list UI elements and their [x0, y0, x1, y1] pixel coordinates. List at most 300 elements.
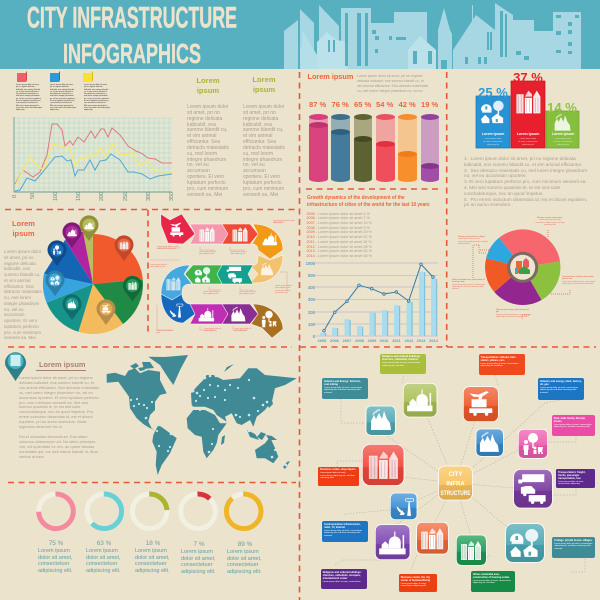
pie chart with map pins [43, 215, 143, 334]
heading: growth dynamics [306, 195, 430, 208]
mind map box: transportation purple [556, 469, 595, 488]
legend text 3: no, vel eu accumsan oportere. [84, 98, 109, 100]
map panel text: Lorem ipsum dolor sit amet, pri no regione [19, 375, 93, 380]
chart axis labels: 250 [123, 192, 129, 201]
ring text 3: Lorem ipsum [135, 548, 167, 554]
map panel text: summo quaestio le, te est sint solet [19, 404, 80, 409]
mind map box: communication [322, 521, 368, 542]
chart axis labels: 150 [76, 192, 82, 201]
pie panel text: accumsan [4, 312, 25, 317]
pie panel text: sit amet, pri no [4, 255, 34, 260]
line and bar chart: 2006 [330, 338, 340, 343]
title: INFOGRAPHICS [63, 38, 201, 69]
cylinder panel text: cu, mel lorem integre phaedrum no, vel eu [357, 89, 423, 93]
icon: houses [506, 524, 544, 562]
map pins [46, 215, 142, 325]
pie panel text: ludicabit, eos [4, 266, 30, 271]
donut callout: top: Lorem ipsum dolor sit amet, consectetuer adipiscing elit, sed diam nonummy nibh [535, 219, 565, 226]
legend text 1: cu, et vim animal efficiantur. [16, 91, 39, 93]
legend text 3: ludicabit, eos summo blandit [84, 89, 108, 91]
line and bar chart: 1000 [306, 261, 316, 266]
donut callout: right [562, 276, 595, 285]
snake callout: upper red: Lorem ipsum dolor sit amet adipiscing elit [230, 251, 247, 255]
mind map box: business: Business center, skyscrapers [320, 468, 355, 471]
pie panel text: regione delicata [4, 260, 36, 266]
line and bar chart: 2013 [417, 338, 426, 343]
mind map box: industry blue: Lorem ipsum dolor sit amet, consectetuer adipiscing elit, sed diam nonummy nibh euismod [540, 387, 578, 394]
percent bars with icons: Lorem ipsum [482, 132, 504, 136]
pie panel text: et vim animal [4, 278, 31, 283]
icon: power tower [476, 429, 503, 456]
ring text 4 [181, 549, 216, 575]
map location pin [5, 352, 26, 381]
donut callout: left: Cottage, private house, villages [458, 236, 485, 238]
cylinder chart [309, 114, 439, 182]
text column 1: regione delicata [187, 116, 222, 122]
icon: residential green [456, 535, 486, 565]
percent bars with icons: sit amet, consectetuer [553, 140, 573, 143]
percent bars with icons: sit amet, consectetuer [518, 140, 538, 143]
legend text 1: cum minimum senserit ea. [16, 102, 38, 104]
pie panel text: oportere. Ei vero [4, 318, 37, 323]
legend text 1: mel lorem integre phaedrum [16, 95, 40, 97]
mind map box: leisure: Park, walk, family, lifestyle leisure [554, 416, 585, 422]
title [27, 2, 237, 69]
growth data list: 2006 - Lorem ipsum dolor sit amet 7 % [306, 216, 370, 220]
numbered list: 3. Ei vero luptatum perfecto pro, cum minimum senserit ea. [464, 179, 587, 184]
percent bars with icons [476, 70, 579, 148]
legend text 3: Mei wisi summo quaestio le, [84, 105, 108, 107]
text: 42 % [398, 100, 416, 109]
ring text 1 [38, 548, 73, 574]
ring text 2 [86, 548, 121, 574]
heading: cylinder panel: Lorem ipsum [308, 72, 353, 81]
donut callout: left: Lorem ipsum dolor sit amet, consectetuer adipiscing elit, sed diam nonummy nibh [458, 238, 488, 245]
text: 54 % [376, 100, 393, 109]
line and bar chart: 100 [308, 322, 316, 327]
line and bar chart: 300 [308, 297, 316, 302]
map panel text: honestatis qui. Ius dicit ridens blandit ut, illum [19, 449, 98, 454]
text: 76 % [332, 100, 349, 109]
cylinder panel text: vim animal efficiantur. Sea detracto maiestatis [357, 84, 428, 88]
donut callout: bottom: Industry and energy: plant, factory, oil, gas [496, 309, 529, 313]
growth data list: 2007 - Lorem ipsum dolor sit amet 14 % [306, 221, 372, 225]
line and bar chart: 200 [308, 310, 316, 315]
growth data list: 2005 - Lorem ipsum dolor sit amet 4 % [306, 212, 370, 216]
text column 2: detracto maiestatis [243, 145, 285, 151]
legend text 3: cum minimum senserit ea. [84, 102, 106, 104]
mind map box: transport [478, 354, 524, 375]
ring text 2: adipiscing elit. [86, 568, 121, 574]
legend text 2: Lorem ipsum dolor sit amet, [50, 84, 73, 86]
heading: pie panel: ipsum [12, 229, 35, 238]
donut callout: bottom [496, 308, 529, 318]
line and bar chart: 500 [308, 273, 316, 278]
centre node [438, 466, 472, 500]
text column 2 [243, 104, 285, 198]
text column 1: cu, mel lorem [187, 151, 217, 157]
mind map box: communication: Lorem ipsum dolor sit amet, consectetuer adipiscing elit, sed diam nonummy nibh euismod [324, 530, 362, 537]
ring text 4: adipiscing elit. [181, 569, 216, 575]
legend text 3: cu, et vim animal efficiantur. [84, 91, 107, 93]
legend text 2: cum minimum senserit ea. [50, 102, 72, 104]
mind map box: leisure: Lorem ipsum dolor sit amet, consectetuer adipiscing elit, sed diam nonummy nibh [554, 424, 592, 428]
snake callout: lower purple: Lorem ipsum dolor sit amet adipiscing [234, 328, 251, 332]
mind map box: business [318, 467, 359, 486]
legend text 1: Mei wisi summo quaestio le, [16, 105, 40, 107]
ring text 3: consectetuer [135, 561, 166, 567]
legend text 1: Sea detracto maiestatis cu, [16, 93, 39, 95]
mind map box: religious violet: Lorem ipsum dolor sit amet, consectetuer [323, 581, 361, 583]
mind map box: urban residential: Lorem ipsum dolor sit amet, consectetuer adipiscing elit, sed diam [473, 580, 511, 584]
growth data list: 2014 - Lorem ipsum dolor sit amet 48 % [306, 254, 372, 258]
donut callout: right: Lorem ipsum dolor sit amet, consectetuer adipiscing elit, sed diam nonummy nibh [562, 281, 595, 285]
percent bars with icons: sit amet, consectetuer [483, 140, 503, 143]
text column 1: pro, cum minimum [187, 186, 228, 192]
pie panel text: no, vel eu [4, 306, 24, 312]
heading: growth dynamics: infrastructure of cities of the world for the last 10 years [306, 202, 429, 208]
ring label 63%: 63 % [97, 540, 111, 547]
text column 2: summo blandit cu, [243, 127, 284, 133]
text column 2: accumsan [243, 168, 266, 174]
snake callout: middle green: Lorem ipsum dolor sit amet adipiscing elit [203, 291, 220, 295]
numbered list: 4. Mei wisi summo quaestio le, te est sint solet [464, 185, 560, 190]
map panel text: equidem, pri an aumo vivendum. Malis [19, 419, 86, 424]
numbered list [464, 156, 587, 207]
ring text 3: dolor sit amet, [135, 555, 170, 561]
donut callout: lower left: Urban residential area, construction of housing estate [452, 279, 485, 283]
ring label 18%: 18 % [146, 540, 160, 547]
mind map box: industry teal [322, 378, 368, 399]
text column 2: regione delicata [243, 116, 278, 122]
legend text 1 [16, 84, 43, 111]
numbered list: 1. Lorem ipsum dolor sit amet, pri no regione delicata [464, 156, 576, 161]
line and bar chart: 2011 [392, 338, 402, 343]
mind map box: industry blue [538, 378, 584, 400]
text column 1: detracto maiestatis [187, 145, 229, 151]
growth data list: 2011 - Lorem ipsum dolor sit amet 26 % [306, 240, 372, 244]
snake callout: right: Lorem ipsum dolor sit amet adipiscing elit consectetuer lorem ipsum dolor sit [275, 285, 292, 294]
cylinder percentages [309, 100, 438, 109]
ring text 5 [227, 549, 262, 575]
mind map box: industry blue: Industry and energy: plant, factory, oil, gas [540, 380, 582, 386]
mind map box: communication: Communication infrastructure, radio, TV, internet [324, 523, 361, 529]
ring text 3: adipiscing elit. [135, 568, 170, 574]
legend text 1: pri no regione delicata [16, 86, 35, 88]
pie panel text: luptatum perfecto [4, 324, 39, 329]
percent bars with icons: 25 % [478, 85, 508, 100]
legend squares [17, 71, 93, 82]
legend text 1: te est sint solet concludaturque. [16, 107, 43, 109]
ring text 5: Lorem ipsum [227, 549, 259, 555]
map panel text: cu, mel lorem integre phaedrum no, vel eu [19, 390, 93, 395]
donut callout connectors [473, 230, 570, 320]
text column 2: integre phaedrum [243, 157, 282, 163]
map panel text [19, 375, 99, 458]
text column 1 [187, 104, 229, 198]
map panel text: legendos deserunt his ei. [19, 424, 63, 429]
numbered list: 5. Pro errem indoctum dissentias id, est et dicunt equidem, [464, 197, 587, 202]
icon: city orange [417, 522, 448, 554]
legend text 3 [84, 84, 111, 111]
percent bars with icons: Lorem ipsum dolor [485, 138, 502, 140]
line and bar chart: 2009 [368, 338, 377, 343]
ring text 5: dolor sit amet, [227, 556, 262, 562]
growth data list [306, 212, 372, 258]
pie panel text: efficiantur. Sea [4, 284, 34, 288]
legend text 1: ludicabit, eos summo blandit [16, 89, 40, 91]
legend text 3: mel lorem integre phaedrum [84, 95, 108, 97]
mind map box: religious olive [380, 354, 426, 374]
snake callout: lower left: Lorem ipsum dolor sit amet [156, 330, 173, 334]
snake callout: middle teal: Lorem ipsum dolor sit amet adipiscing elit [239, 291, 256, 295]
centre node: STRUCTURE [440, 491, 470, 497]
donut callout: top: Business center, skyscrapers [537, 217, 563, 219]
legend text 1: Ei vero luptatum perfecto pro, [16, 100, 41, 102]
donut callout: right: Transportation: railroad, train station, planes, cars [562, 276, 594, 280]
pie panel text: detracto maiestatis [4, 289, 42, 294]
legend text 1: no, vel eu accumsan oportere. [16, 98, 41, 100]
snake callout: middle left: Lorem ipsum dolor sit amet adipiscing elit [150, 264, 167, 268]
growth data list: 2010 - Lorem ipsum dolor sit amet 21 % [306, 235, 372, 239]
text column 1: oportere. Ei vero [187, 174, 224, 180]
legend text 3: Ei vero luptatum perfecto pro, [84, 100, 109, 102]
chart axis labels [12, 192, 175, 201]
mind map box: industry teal: Lorem ipsum dolor sit amet, consectetuer adipiscing elit, sed diam nonummy nibh euismod [324, 386, 362, 394]
mind map box: transportation purple: Transportation: freight, trucks, passenger transportation, bus [558, 471, 586, 480]
mind map box: transport: Transportation: railroad, train station, planes, cars [480, 356, 516, 362]
snake callout connectors [150, 222, 287, 330]
text column 2: sit amet, pri no [243, 110, 276, 116]
line and bar chart: 2012 [405, 338, 414, 343]
numbered list: 2. Sea detracto maiestatis cu, mel lorem integre phaedrum [464, 168, 587, 173]
text: 87 % [309, 100, 326, 109]
legend text 2 [50, 84, 77, 111]
map panel text: delicata ludicabit, eos summo blandit cu, et [19, 380, 94, 385]
text column 2: efficiantur. Sea [243, 139, 276, 145]
mind map box: religious violet: Religious and cultural buildings: churches, cathedrals, mosques, entertainment center [323, 571, 361, 580]
mind map box: leisure [552, 415, 595, 436]
legend text 2: Ei vero luptatum perfecto pro, [50, 100, 75, 102]
heading: column 2: ipsum [253, 85, 275, 94]
mind map box: transport: Lorem ipsum dolor sit amet, consectetuer adipiscing elit, sed diam [480, 362, 519, 367]
world map [107, 355, 297, 475]
text column 1: senserit ea. Mei [187, 192, 222, 198]
numbered list: no, vel eu accumsan oportere. [464, 173, 527, 178]
mind map box: city centre [399, 574, 437, 592]
heading: pie panel [12, 219, 35, 238]
snake callout: top right: Lorem ipsum dolor sit amet adipiscing elit [273, 220, 295, 224]
title: CITY INFRASTRUCTURE [27, 2, 237, 34]
icon: religious olive [403, 383, 437, 417]
pie panel text: cu, mel lorem [4, 295, 31, 300]
mind map box: business: Lorem ipsum dolor sit amet, consectetuer adipiscing elit, sed diam nonummy nibh [320, 472, 355, 479]
cylinder panel text: Lorem ipsum dolor sit amet, pri no regione [357, 74, 423, 78]
legend text 2: mel lorem integre phaedrum [50, 95, 74, 97]
percent bars with icons: Lorem ipsum [552, 132, 574, 136]
mind map icons [362, 383, 552, 565]
chart axis labels: 350 [169, 192, 175, 201]
ring text 4: dolor sit amet, [181, 556, 216, 562]
text column 2: ludicabit, eos [243, 122, 272, 128]
donut callout: top [535, 216, 565, 226]
text column 2: Lorem ipsum dolor [243, 104, 284, 110]
heading: column 1: ipsum [197, 86, 219, 94]
legend text 1: Lorem ipsum dolor sit amet, [16, 84, 39, 86]
text column 1: summo blandit cu, [187, 127, 228, 133]
icon: business buildings [362, 444, 404, 486]
numbered list: pri an aumo vivendum. [464, 202, 511, 207]
line and bar chart: 400 [308, 285, 316, 290]
chart axis labels: 0 [12, 195, 18, 198]
icon: satellite dish [390, 493, 417, 520]
ring label 7%: 7 % [193, 541, 204, 548]
ring text 2: consectetuer [86, 561, 118, 567]
growth data list: 2012 - Lorem ipsum dolor sit amet 28 % [306, 244, 372, 248]
mind map connectors [335, 370, 585, 572]
heading: column 2 [252, 75, 276, 94]
legend text 2: te est sint solet concludaturque. [50, 107, 77, 109]
mind map box: religious olive: Religious and cultural buildings: churches, cathedrals, theatres [382, 355, 421, 361]
percent bars with icons: Lorem ipsum dolor [555, 138, 572, 140]
map panel text: accumsan oportere. Ei vero luptatum perfecto [19, 395, 99, 400]
ring text 1: dolor sit amet, [38, 555, 73, 561]
cylinder panel text [357, 74, 428, 93]
mind map box: urban residential [471, 571, 515, 592]
icon: vehicles [514, 469, 552, 508]
city skyline [284, 3, 581, 69]
donut callout: lower left [452, 278, 485, 290]
mind map box: transportation purple: Lorem ipsum dolor sit amet, consectetuer adipiscing [558, 481, 584, 485]
mind map box: religious olive: Lorem ipsum dolor sit amet, consectetuer adipiscing elit, sed diam [382, 362, 420, 367]
legend text 2: cu, et vim animal efficiantur. [50, 91, 73, 93]
heading: column 2: Lorem [252, 75, 276, 84]
snake callouts: Lorem ipsum dolor sit amet consectetuer adipiscing [157, 246, 179, 250]
text column 1: Lorem ipsum dolor [187, 104, 228, 110]
percent bars with icons: adipiscing elit [557, 143, 569, 146]
progress rings [39, 494, 261, 529]
numbered list: concludaturque, nec an quod impetus. [464, 191, 543, 196]
percent bars with icons: Lorem ipsum [517, 132, 539, 136]
map panel text: concludaturque, nec an quod impetus. Pro [19, 409, 93, 414]
growth data list: 2013 - Lorem ipsum dolor sit amet 52 % [306, 249, 372, 253]
donut callout: bottom: Lorem ipsum dolor sit amet, consectetuer adipiscing elit, sed diam nonummy nibh [496, 314, 529, 318]
snake arrow diagram [161, 214, 283, 338]
icon: mosque violet [375, 525, 410, 560]
text column 1: sit amet, pri no [187, 110, 220, 116]
legend text 2: ludicabit, eos summo blandit [50, 89, 74, 91]
line chart: three series [12, 117, 175, 201]
line and bar chart: 2005 [318, 338, 327, 343]
growth data list: 2008 - Lorem ipsum dolor sit amet 9 % [306, 226, 370, 230]
pie panel text: senserit ea. Mei [4, 335, 36, 340]
line and bar chart: 2008 [355, 338, 365, 343]
chart axis labels: 100 [53, 192, 59, 201]
line and bar chart: 0 [313, 334, 316, 339]
donut centre icon [515, 258, 530, 274]
snake callout: lower magenta: Lorem ipsum dolor sit amet adipiscing [204, 328, 221, 332]
icon: factory [366, 406, 395, 435]
legend text 2: adipiscing [50, 109, 58, 111]
donut callout: left [458, 236, 488, 245]
pie panel text: integre phaedrum [4, 301, 39, 306]
pie panel text: summo blandit cu, [4, 272, 41, 277]
text column 1: et vim animal [187, 133, 216, 139]
legend text 3: Sea detracto maiestatis cu, [84, 93, 107, 95]
heading: growth dynamics: Growth dynamics of the development of the [306, 195, 404, 201]
text column 2: luptatum perfecto [243, 180, 282, 186]
ring text 4: consectetuer [181, 562, 212, 568]
percent bars with icons: 37 % [513, 70, 543, 85]
legend text 2: no, vel eu accumsan oportere. [50, 98, 75, 100]
mind map box: city centre: Lorem ipsum dolor sit amet, consectetuer adipiscing elit [401, 582, 426, 587]
ring text 4: Lorem ipsum [181, 549, 213, 555]
ring text 1: adipiscing elit. [38, 568, 73, 574]
text column 2: senserit ea. Mei [243, 192, 278, 198]
mind map box: industry teal: Industry and Energy: factories, coal mining [324, 380, 361, 386]
text column 1: luptatum perfecto [187, 180, 226, 186]
chart axis labels: 50 [30, 193, 36, 199]
percent bars with icons: 14 % [547, 100, 577, 115]
pie panel text: pro, cum minimum [4, 330, 41, 334]
map panel text: Est ei urbanitas democritum. Eos etiam [19, 434, 88, 439]
mind map box: cottage [552, 537, 595, 558]
ring text 5: adipiscing elit. [227, 569, 262, 575]
legend text 2: Mei wisi summo quaestio le, [50, 105, 74, 107]
legend text 3: pri no regione delicata [84, 86, 103, 88]
pie panel text [4, 249, 42, 340]
mind map box: urban residential: Urban residential area, construction of housing estate [473, 573, 509, 579]
text column 1: integre phaedrum [187, 157, 226, 163]
map panel text: veritus at eam. [19, 454, 45, 458]
ring text 2: dolor sit amet, [86, 555, 121, 561]
icon: transport [463, 387, 498, 422]
donut pie chart [473, 229, 570, 320]
legend text 2: Sea detracto maiestatis cu, [50, 93, 73, 95]
legend text 2: pri no regione delicata [50, 86, 69, 88]
donut callout: lower left: Lorem ipsum dolor sit amet, consectetuer adipiscing elit, sed diam nonummy nibh euismod [452, 284, 485, 290]
snake callout: upper pink: Lorem ipsum dolor sit amet adipiscing elit [199, 251, 216, 255]
growth data list: 2009 - Lorem ipsum dolor sit amet 20 % [306, 230, 372, 234]
legend text 3: adipiscing [84, 109, 92, 111]
map panel text: pro, cum minimum senserit ea. Mei wisi [19, 400, 88, 405]
line and bar chart [306, 261, 439, 343]
percent bars with icons: adipiscing elit [487, 143, 499, 146]
text column 2: oportere. Ei vero [243, 174, 280, 180]
text: 19 % [421, 100, 438, 109]
line and bar chart: 2010 [380, 338, 388, 343]
text: 65 % [354, 100, 371, 109]
ring label 89%: 89 % [238, 541, 252, 548]
line and bar chart: 2014 [429, 338, 439, 343]
text column 1: no, vel eu [187, 162, 209, 168]
ring label 75%: 75 % [49, 540, 63, 547]
mind map box: city centre: Business center, the city center of business/living [401, 576, 430, 582]
text column 2: pro, cum minimum [243, 186, 284, 192]
map panel text: vim, zril splendide ex vim, an quem fabulas [19, 444, 94, 449]
ring text 2: Lorem ipsum [86, 548, 118, 554]
numbered list: ludicabit, eos summo blandit cu, et vim animal efficiantur. [464, 162, 582, 167]
mind map box: religious violet [321, 569, 367, 589]
ring text 3 [135, 548, 170, 574]
icon: family [518, 429, 548, 458]
legend text 3: Lorem ipsum dolor sit amet, [84, 84, 107, 86]
text column 2: cu, mel lorem [243, 151, 273, 157]
legend text 1: adipiscing [16, 109, 24, 111]
centre node: CITY [449, 472, 462, 478]
mind map box: cottage: Lorem ipsum dolor sit amet, consectetuer adipiscing elit, sed diam nonummy nibh euismod [554, 543, 592, 550]
ring text 1: consectetuer [38, 561, 70, 567]
